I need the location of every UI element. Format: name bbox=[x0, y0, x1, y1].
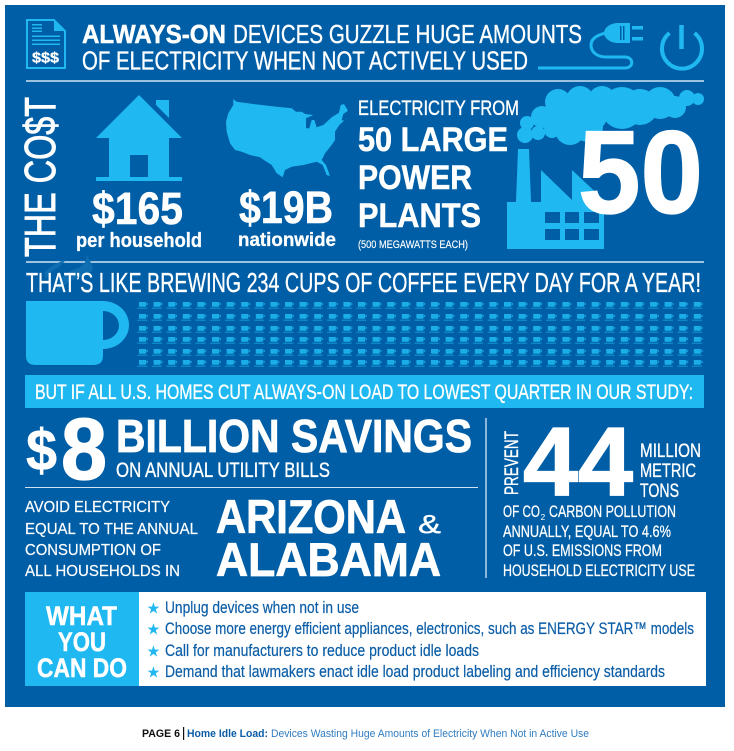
banner: if all homes cut load bbox=[25, 375, 704, 408]
text: carbon pollution: OF U.S. EMISSIONS FROM bbox=[503, 542, 662, 560]
text: Arizona and Alabama bbox=[216, 491, 441, 587]
text: electricity from 50 power plants: ELECTRICITY FROM bbox=[358, 96, 519, 120]
stat: per household: $165 bbox=[92, 183, 183, 234]
stat: nationwide: $19B bbox=[239, 182, 333, 233]
icon: house bbox=[96, 95, 182, 181]
heading: DEVICES GUZZLE HUGE AMOUNTS bbox=[233, 21, 582, 49]
stat: 8 billion savings bbox=[26, 401, 472, 498]
heading: what you can do: WHAT bbox=[46, 601, 117, 631]
list: actions: ★ bbox=[146, 622, 160, 638]
stat: 8 billion savings: ON ANNUAL UTILITY BILLS bbox=[116, 459, 330, 482]
stat: 8 billion savings: BILLION SAVINGS bbox=[116, 410, 472, 462]
stat: per household bbox=[76, 183, 202, 252]
heading: what you can do bbox=[37, 601, 127, 683]
text: carbon pollution: 2 bbox=[540, 512, 546, 522]
text: avoid electricity bbox=[25, 499, 198, 580]
stat: prevent 44 million metric tons: PREVENT bbox=[501, 431, 523, 495]
stat: nationwide bbox=[238, 182, 336, 251]
text: electricity from 50 power plants: 50 LARGE bbox=[358, 121, 508, 159]
footer: Devices Wasting Huge Amounts of Electricity When Not in Active Use bbox=[271, 728, 589, 740]
text: electricity from 50 power plants: POWER bbox=[358, 159, 472, 197]
text: electricity from 50 power plants bbox=[358, 96, 519, 251]
icon: plug and cord bbox=[538, 23, 643, 68]
list: actions: ★ bbox=[146, 664, 160, 682]
list: actions: Call for manufacturers to reduce product idle loads bbox=[165, 641, 479, 660]
list: actions: ★ bbox=[146, 600, 160, 618]
heading: what you can do: CAN DO bbox=[37, 653, 127, 683]
stat: prevent 44 million metric tons: 44 bbox=[523, 407, 633, 516]
icon: electricity bill: $$$ bbox=[32, 50, 59, 66]
heading: what you can do: YOU bbox=[58, 627, 106, 657]
text: carbon pollution: CARBON POLLUTION bbox=[549, 503, 676, 521]
icon: large coffee mug bbox=[26, 301, 129, 365]
text: avoid electricity: CONSUMPTION OF bbox=[25, 542, 161, 559]
text: avoid electricity: AVOID ELECTRICITY bbox=[25, 499, 170, 516]
icon: smoke cloud bbox=[517, 86, 704, 145]
chart: 234 small coffee cups bbox=[137, 302, 703, 366]
text: carbon pollution: ANNUALLY, EQUAL TO 4.6% bbox=[503, 523, 671, 541]
list: actions: Unplug devices when not in use bbox=[165, 598, 359, 617]
text: carbon pollution: OF CO bbox=[503, 503, 540, 521]
footer bbox=[142, 727, 589, 740]
text: Arizona and Alabama: & bbox=[418, 509, 441, 539]
stat: prevent 44 million metric tons: MILLION bbox=[640, 441, 701, 462]
stat: prevent 44 million metric tons: METRIC bbox=[640, 461, 696, 482]
icon: coffee steam bbox=[44, 252, 93, 294]
stat: 8 billion savings: 8 bbox=[61, 401, 107, 498]
icon: power button bbox=[662, 25, 702, 69]
list: actions bbox=[146, 598, 694, 682]
big number 50: 50 bbox=[578, 107, 703, 239]
text: avoid electricity: ALL HOUSEHOLDS IN bbox=[25, 563, 180, 580]
panel: what you can do bbox=[25, 592, 706, 686]
icon: US map bbox=[226, 99, 348, 177]
icon: electricity bill bbox=[27, 20, 65, 68]
stat: prevent 44 million metric tons bbox=[501, 407, 701, 516]
text: electricity from 50 power plants: (500 MEGAWATTS EACH) bbox=[358, 239, 468, 251]
text: electricity from 50 power plants: PLANTS bbox=[358, 197, 481, 235]
footer: Home Idle Load: bbox=[187, 728, 268, 740]
text: avoid electricity: EQUAL TO THE ANNUAL bbox=[25, 521, 198, 538]
text: carbon pollution bbox=[503, 503, 695, 580]
text: Arizona and Alabama: ARIZONA bbox=[216, 491, 406, 544]
text: Arizona and Alabama: ALABAMA bbox=[216, 534, 441, 587]
list: actions: ★ bbox=[146, 644, 160, 660]
icon: factory bbox=[507, 149, 604, 249]
stat: per household: per household bbox=[76, 230, 202, 252]
footer: PAGE 6 bbox=[142, 728, 180, 740]
stat: nationwide: nationwide bbox=[238, 230, 336, 251]
heading: ALWAYS-ON bbox=[82, 21, 226, 49]
label: the cost: THE CO$T bbox=[16, 97, 65, 257]
stat: prevent 44 million metric tons: TONS bbox=[640, 481, 679, 502]
heading bbox=[82, 21, 582, 76]
heading: OF ELECTRICITY WHEN NOT ACTIVELY USED bbox=[82, 48, 528, 76]
stat: 8 billion savings: $ bbox=[26, 418, 57, 483]
